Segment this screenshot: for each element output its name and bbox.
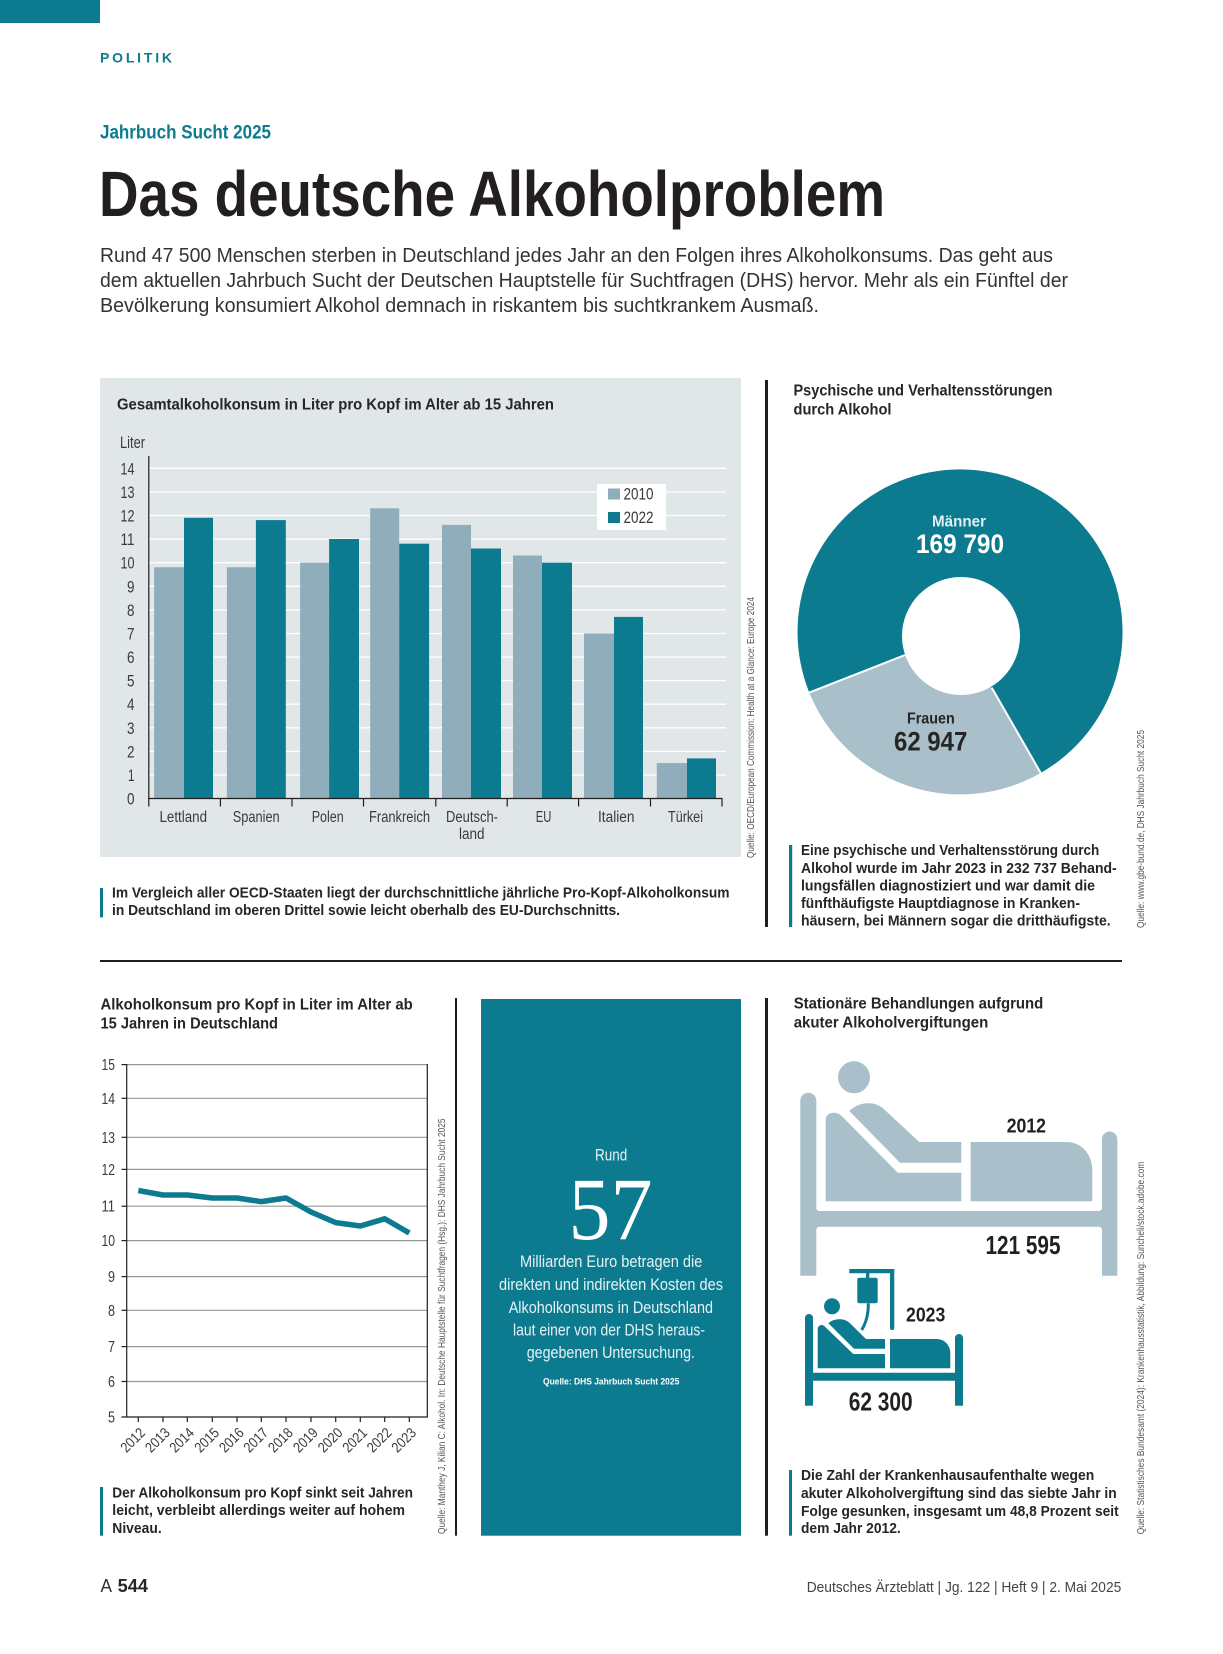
axes [148, 456, 722, 806]
donut chart [798, 469, 1123, 794]
line chart year labels: 2020 [315, 1425, 346, 1456]
line chart year labels: 2023 [389, 1425, 420, 1456]
panel: line chart of consumption in Germany [100, 996, 428, 1456]
consumption line [138, 1190, 409, 1233]
source: hospital treatments: Quelle: Statistisches Bundesamt (2024): Krankenhausstatistik, Abbildung: Suncheli/stock.adobe.com [1135, 1162, 1147, 1534]
label: 2023: 2023 [906, 1305, 945, 1327]
label: 2012: 2012 [1007, 1116, 1046, 1138]
callout text: gegebenen Untersuchung. [527, 1344, 695, 1362]
y axis labels: 10 [120, 555, 134, 573]
caption: line chart: Niveau. [112, 1520, 162, 1537]
caption: hospital treatments: Folge gesunken, insgesamt um 48,8 Prozent seit [801, 1503, 1119, 1520]
line chart y axis labels: 14 [102, 1091, 115, 1108]
caption: donut chart: lungsfällen diagnostiziert und war damit die [801, 878, 1095, 895]
panel: hospital treatments [794, 996, 1117, 1416]
y axis labels: 0 [127, 790, 134, 808]
caption: hospital treatments [789, 1467, 1119, 1537]
category labels: Lettland [160, 809, 207, 826]
line chart y axis labels: 6 [108, 1374, 115, 1391]
donut heading [794, 382, 1052, 418]
line chart year labels [118, 1425, 420, 1456]
intro text [100, 245, 1068, 317]
line chart year labels: 2018 [266, 1425, 297, 1456]
y axis labels: 11 [120, 531, 134, 549]
line chart y axis labels: 13 [102, 1130, 115, 1147]
legend: 2022 [624, 509, 654, 527]
caption: donut chart: fünfthäufigste Hauptdiagnose in Kranken- [801, 895, 1080, 912]
category labels: Türkei [668, 809, 703, 826]
source: line chart: Quelle: Manthey J, Kilian C: Alkohol. In: Deutsche Hauptstelle für Suchtfragen (Hsg.): DHS Jahrbuch Sucht 2025 [436, 1118, 448, 1534]
section marker [0, 0, 100, 23]
label: women [894, 710, 967, 756]
value: 2012: 121 595 [986, 1230, 1060, 1260]
panel: donut chart of disorders by sex [794, 382, 1123, 794]
line chart year labels: 2019 [291, 1425, 322, 1456]
caption: hospital treatments: Die Zahl der Krankenhausaufenthalte wegen [801, 1467, 1094, 1484]
bars 2010 [154, 508, 687, 798]
label: men: 169 790 [916, 529, 1004, 559]
line chart y axis labels: 8 [108, 1303, 115, 1320]
line chart year labels: 2012 [118, 1425, 149, 1456]
category labels: Spanien [233, 809, 280, 826]
legend [597, 484, 666, 530]
line chart year labels: 2014 [167, 1425, 198, 1456]
y axis labels: 6 [127, 649, 134, 667]
label: women: 62 947 [894, 726, 967, 756]
caption: hospital treatments: akuter Alkoholvergiftung sind das siebte Jahr in [801, 1485, 1117, 1502]
y axis labels: 9 [127, 578, 134, 596]
line chart y axis labels: 15 [102, 1057, 115, 1074]
intro text: dem aktuellen Jahrbuch Sucht der Deutschen Hauptstelle für Suchtfragen (DHS) hervor. Mehr als ein Fünftel der [100, 270, 1068, 292]
bar chart heading: Gesamtalkoholkonsum in Liter pro Kopf im Alter ab 15 Jahren [117, 397, 554, 414]
line chart year labels: 2022 [364, 1425, 395, 1456]
y axis labels: 8 [127, 602, 134, 620]
bars 2022 [184, 518, 716, 798]
caption: hospital treatments: dem Jahr 2012. [801, 1520, 901, 1537]
y axis labels: 12 [120, 508, 134, 526]
caption: bar chart: Im Vergleich aller OECD-Staaten liegt der durchschnittliche jährliche Pro-Kopf-Alkoholkonsum [112, 884, 730, 901]
category labels: Frankreich [369, 809, 430, 826]
line chart heading: 15 Jahren in Deutschland [100, 1016, 278, 1032]
callout big number: 57 [568, 1161, 652, 1259]
panel: bar chart of alcohol consumption by country [100, 378, 741, 857]
label: men [916, 514, 1004, 559]
treatments heading [794, 996, 1043, 1032]
journal footer: Deutsches Ärzteblatt | Jg. 122 | Heft 9 | 2. Mai 2025 [807, 1579, 1121, 1596]
intro text: Rund 47 500 Menschen sterben in Deutschland jedes Jahr an den Folgen ihres Alkoholkonsums. Das geht aus [100, 245, 1053, 267]
label: men: Männer [932, 514, 986, 530]
kicker: Jahrbuch Sucht 2025 [100, 121, 271, 143]
callout text: direkten und indirekten Kosten des [499, 1276, 723, 1294]
caption: donut chart: häusern, bei Männern sogar die dritthäufigste. [801, 912, 1111, 930]
caption: donut chart [789, 842, 1117, 930]
category labels: land [459, 826, 484, 843]
legend: 2010 [624, 486, 654, 504]
source: donut chart: Quelle: www.gbe-bund.de, DHS Jahrbuch Sucht 2025 [1135, 730, 1147, 928]
y axis labels: 2 [127, 743, 134, 761]
line chart y axis labels: 10 [102, 1233, 115, 1250]
line chart heading [100, 996, 413, 1032]
category labels: Italien [598, 809, 634, 826]
line chart y axis labels [102, 1057, 115, 1426]
callout text: Alkoholkonsums in Deutschland [509, 1299, 713, 1317]
line chart year labels: 2021 [340, 1425, 371, 1456]
line chart year labels: 2017 [241, 1425, 272, 1456]
line chart y axis labels: 5 [108, 1410, 115, 1426]
line chart year labels: 2015 [192, 1425, 223, 1456]
category labels: Polen [312, 809, 344, 826]
source: bar chart: Quelle: OECD/European Commission: Health at a Glance: Europe 2024 [745, 597, 757, 858]
icon: large bed 2012 [800, 1061, 1117, 1276]
caption: bar chart: in Deutschland im oberen Drittel sowie leicht oberhalb des EU-Durchschnitts. [112, 902, 620, 919]
y axis labels: 3 [127, 720, 134, 738]
line chart year labels: 2016 [217, 1425, 248, 1456]
y axis labels: 14 [120, 460, 134, 478]
callout text [499, 1253, 723, 1362]
y axis labels: 4 [127, 696, 134, 714]
line chart y axis labels: 11 [102, 1199, 115, 1216]
caption: bar chart [100, 884, 730, 919]
y axis labels [120, 460, 134, 808]
label: women: Frauen [907, 710, 955, 728]
line chart y axis labels: 12 [102, 1162, 115, 1179]
y axis labels: 1 [128, 767, 134, 785]
treatments heading: Stationäre Behandlungen aufgrund [794, 996, 1043, 1012]
caption: line chart [100, 1484, 413, 1537]
callout intro word: Rund [595, 1146, 627, 1164]
y axis labels: 7 [127, 626, 134, 644]
category labels: Deutsch- [446, 809, 498, 826]
caption: line chart: Der Alkoholkonsum pro Kopf sinkt seit Jahren [112, 1484, 413, 1501]
intro text: Bevölkerung konsumiert Alkohol demnach in riskantem bis suchtkrankem Ausmaß. [100, 295, 819, 317]
section label: POLITIK [100, 50, 172, 66]
treatments heading: akuter Alkoholvergiftungen [794, 1014, 988, 1032]
line chart heading: Alkoholkonsum pro Kopf in Liter im Alter ab [100, 996, 413, 1013]
callout text: laut einer von der DHS heraus- [513, 1322, 705, 1340]
page number: 544 [118, 1576, 148, 1596]
y axis unit: Liter [120, 434, 145, 452]
page number [100, 1576, 148, 1596]
donut heading: durch Alkohol [794, 402, 892, 418]
caption: donut chart: Alkohol wurde im Jahr 2023 in 232 737 Behand- [801, 860, 1117, 877]
category labels: EU [536, 809, 551, 826]
line chart y axis labels: 7 [108, 1339, 115, 1356]
callout source: Quelle: DHS Jahrbuch Sucht 2025 [543, 1376, 680, 1388]
title: Das deutsche Alkoholproblem [99, 158, 885, 230]
caption: donut chart: Eine psychische und Verhaltensstörung durch [801, 842, 1099, 859]
page number: A [100, 1576, 112, 1596]
caption: line chart: leicht, verbleibt allerdings weiter auf hohem [112, 1502, 405, 1519]
line chart axes [122, 1064, 428, 1422]
icon: small bed with infusion 2023 [805, 1269, 963, 1406]
panel: cost callout [481, 999, 741, 1536]
value: 2023: 62 300 [849, 1386, 913, 1416]
line chart y axis labels: 9 [108, 1269, 115, 1286]
category labels [160, 809, 703, 843]
callout text: Milliarden Euro betragen die [520, 1253, 702, 1271]
line chart year labels: 2013 [143, 1425, 174, 1456]
donut heading: Psychische und Verhaltensstörungen [794, 382, 1052, 400]
y axis labels: 13 [120, 484, 134, 502]
y axis labels: 5 [127, 673, 134, 691]
